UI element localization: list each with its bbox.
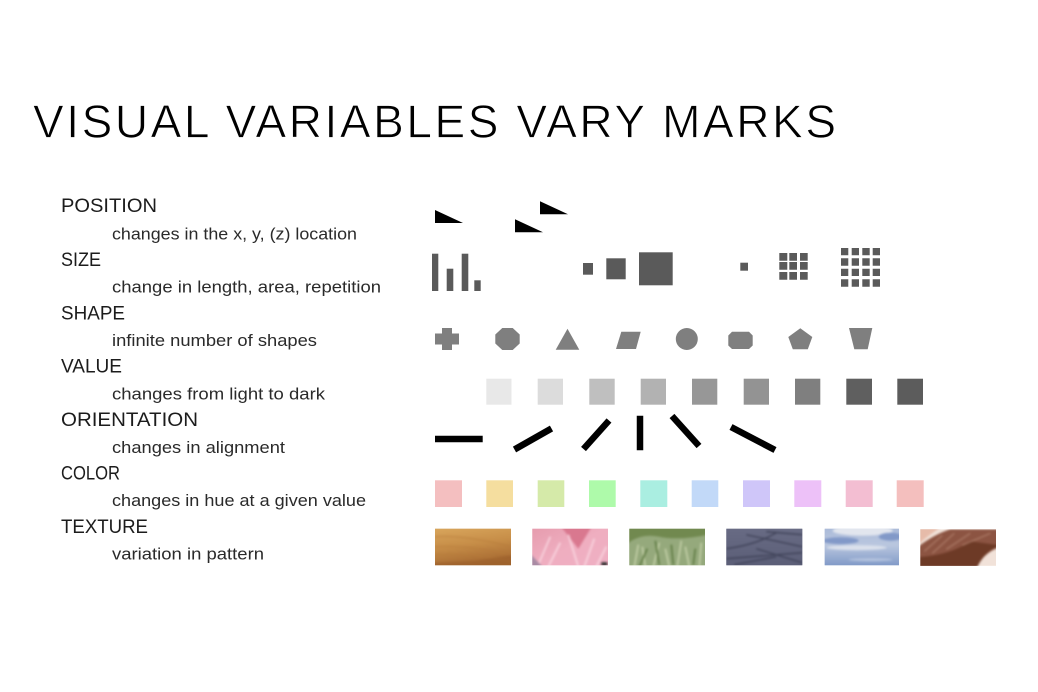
squares: repetition xyxy=(740,248,880,287)
color marks xyxy=(435,480,924,507)
squares: area xyxy=(583,252,673,285)
label: texture: variation in pattern xyxy=(112,546,264,564)
label: value: changes from light to dark xyxy=(112,386,326,404)
value marks xyxy=(486,379,923,405)
texture: sand xyxy=(435,528,511,566)
label: value: VALUE xyxy=(61,356,122,378)
label: color: COLOR xyxy=(61,462,120,484)
texture marks xyxy=(432,526,999,569)
texture: pink petal xyxy=(532,528,608,566)
label: orientation: changes in alignment xyxy=(112,439,285,457)
orientation marks xyxy=(435,416,775,450)
label: size: change in length, area, repetition xyxy=(112,278,381,296)
texture: sky xyxy=(824,528,899,566)
label: shape xyxy=(61,302,317,350)
label: orientation: ORIENTATION xyxy=(61,409,198,431)
label: texture xyxy=(61,516,264,564)
variable list xyxy=(61,195,381,564)
label: position xyxy=(61,195,357,244)
label: color xyxy=(61,462,366,510)
texture: fur xyxy=(920,529,996,566)
texture: slate xyxy=(726,528,802,566)
label: size xyxy=(61,249,381,296)
label: shape: SHAPE xyxy=(61,302,125,324)
label: value xyxy=(61,356,326,404)
label: texture: TEXTURE xyxy=(61,516,148,538)
size marks xyxy=(432,248,880,291)
label: color: changes in hue at a given value xyxy=(112,492,366,510)
texture: grass xyxy=(629,528,705,566)
shape marks xyxy=(435,328,872,350)
label: orientation xyxy=(61,409,285,457)
title: VISUAL VARIABLES VARY MARKS xyxy=(33,96,836,148)
label: position: POSITION xyxy=(61,195,157,217)
position marks: triangles xyxy=(435,201,568,232)
bars: length xyxy=(432,254,481,291)
label: shape: infinite number of shapes xyxy=(112,332,317,350)
label: size: SIZE xyxy=(61,249,101,271)
label: position: changes in the x, y, (z) location xyxy=(112,226,357,244)
